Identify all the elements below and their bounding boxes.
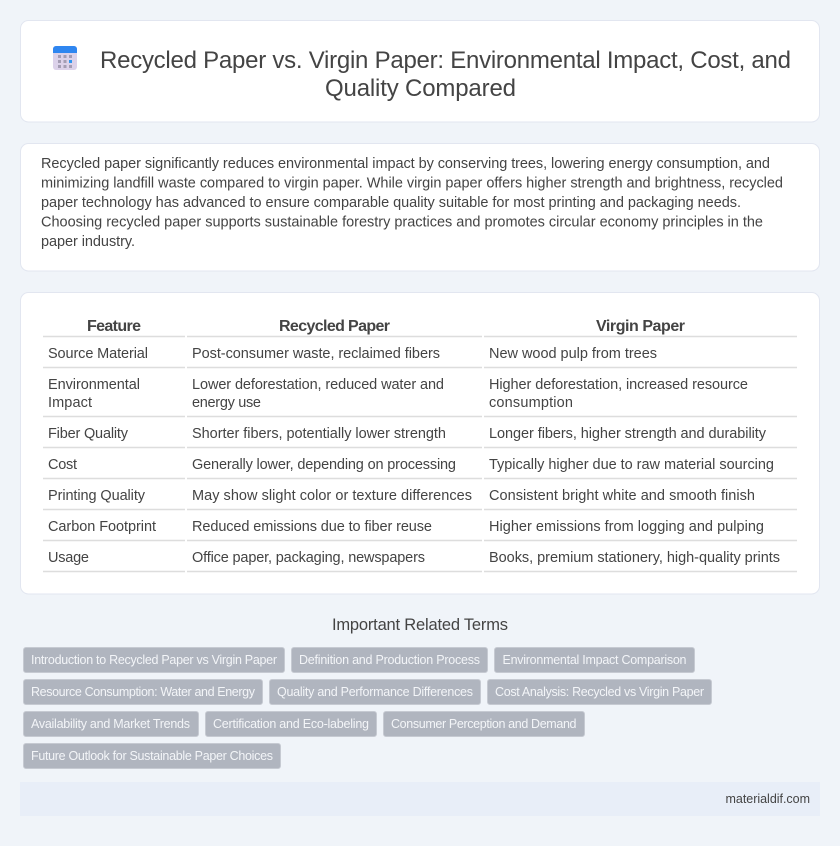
heading: important related terms: Important Related Terms xyxy=(332,616,508,634)
table row: environmental impact: Environmental xyxy=(48,377,140,393)
tag: Resource Consumption: Water and Energy xyxy=(31,685,256,699)
table row: cost: Cost xyxy=(48,457,77,473)
table row: fiber quality xyxy=(48,426,767,442)
text block: introduction paragraph: paper industry. xyxy=(41,234,135,250)
table row: source material xyxy=(48,346,657,362)
table header: Recycled Paper xyxy=(279,318,390,335)
tag: Quality and Performance Differences xyxy=(277,685,473,699)
table header: Virgin Paper xyxy=(596,318,685,335)
tag: Certification and Eco-labeling xyxy=(213,717,369,731)
table row: environmental impact: consumption xyxy=(489,395,573,411)
tag: Environmental Impact Comparison xyxy=(502,653,687,667)
table row: fiber quality: Shorter fibers, potentially lower strength xyxy=(192,426,446,442)
table row: carbon footprint: Higher emissions from logging and pulping xyxy=(489,519,764,535)
tag: Consumer Perception and Demand xyxy=(391,717,577,731)
table row: cost xyxy=(48,457,774,473)
table row: printing quality xyxy=(48,488,755,504)
table row: fiber quality: Longer fibers, higher strength and durability xyxy=(489,426,767,442)
panel: introduction xyxy=(20,144,820,271)
table row: carbon footprint xyxy=(48,519,764,535)
table row: printing quality: Printing Quality xyxy=(48,488,146,504)
tag xyxy=(292,648,488,672)
text block: introduction paragraph: Recycled paper significantly reduces environmental impact by conserving trees, lowering energy consumption, and xyxy=(41,156,770,172)
panel: comparison table xyxy=(20,292,820,594)
table row: printing quality: May show slight color or texture differences xyxy=(192,488,472,504)
tag: Definition and Production Process xyxy=(299,653,480,667)
table row: source material: New wood pulp from trees xyxy=(489,346,657,362)
tag xyxy=(24,744,280,768)
tag xyxy=(488,680,712,704)
table header: Feature xyxy=(87,318,141,335)
tag xyxy=(384,712,584,736)
panel: title header xyxy=(20,20,820,122)
tag xyxy=(24,712,198,736)
table row: carbon footprint: Reduced emissions due to fiber reuse xyxy=(192,519,432,535)
tag xyxy=(24,648,284,672)
table row: usage: Usage xyxy=(48,550,89,566)
title xyxy=(100,47,791,102)
table row: environmental impact: Higher deforestation, increased resource xyxy=(489,377,748,393)
tag xyxy=(206,712,376,736)
tag: Future Outlook for Sustainable Paper Choices xyxy=(31,749,273,763)
tag: Cost Analysis: Recycled vs Virgin Paper xyxy=(495,685,704,699)
tag xyxy=(270,680,480,704)
table row: usage xyxy=(48,550,780,566)
footer bar xyxy=(20,782,820,816)
table row: source material: Source Material xyxy=(48,346,148,362)
table row: environmental impact: Lower deforestation, reduced water and xyxy=(192,377,444,393)
table row: printing quality: Consistent bright white and smooth finish xyxy=(489,488,755,504)
table row: environmental impact: Impact xyxy=(48,395,92,411)
tag list: related terms xyxy=(24,648,712,768)
text block: introduction paragraph: paper technology has advanced to ensure comparable quality suitable for most printing and packaging needs. xyxy=(41,195,741,211)
table row: usage: Books, premium stationery, high-quality prints xyxy=(489,550,780,566)
tag: Availability and Market Trends xyxy=(31,717,190,731)
table row: fiber quality: Fiber Quality xyxy=(48,426,129,442)
text block: introduction paragraph: Choosing recycled paper supports sustainable forestry practices and promotes circular economy principles in the xyxy=(41,214,763,230)
text block: introduction paragraph xyxy=(41,156,783,250)
table row: carbon footprint: Carbon Footprint xyxy=(48,519,156,535)
title: Recycled Paper vs. Virgin Paper: Environmental Impact, Cost, and xyxy=(100,47,791,74)
table row: cost: Generally lower, depending on processing xyxy=(192,457,456,473)
table row: source material: Post-consumer waste, reclaimed fibers xyxy=(192,346,440,362)
tag: Introduction to Recycled Paper vs Virgin Paper xyxy=(31,653,277,667)
table row: environmental impact: energy use xyxy=(192,395,261,411)
tag xyxy=(494,648,694,672)
icon: calendar xyxy=(53,46,77,70)
table header xyxy=(87,318,685,335)
text block: introduction paragraph: minimizing landfill waste compared to virgin paper. While virgin paper offers higher strength and brightness, recycled xyxy=(41,176,783,192)
table row: cost: Typically higher due to raw material sourcing xyxy=(489,457,774,473)
table row: environmental impact xyxy=(48,377,748,411)
tag xyxy=(24,680,262,704)
title: Quality Compared xyxy=(325,75,516,102)
table row: usage: Office paper, packaging, newspapers xyxy=(192,550,425,566)
footer text: source: materialdif.com xyxy=(726,792,810,806)
